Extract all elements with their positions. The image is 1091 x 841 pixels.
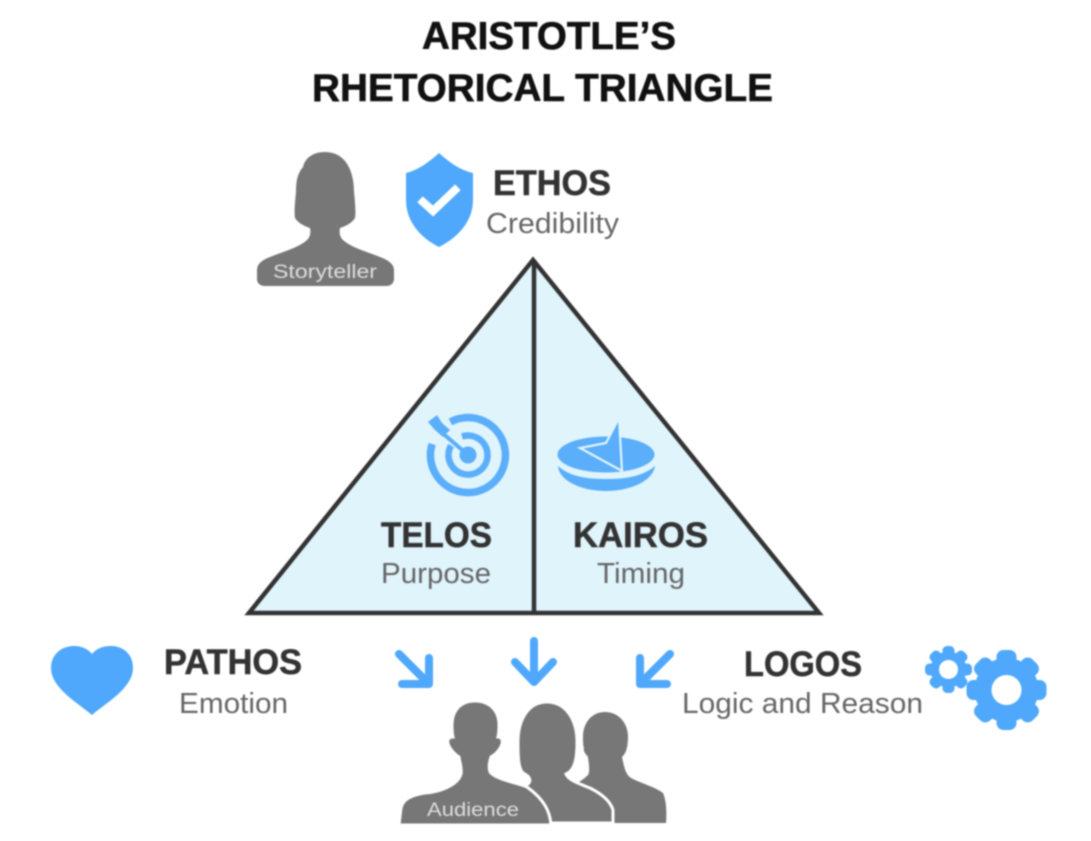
- logos label: [682, 645, 923, 720]
- pathos label: PATHOS: [164, 643, 302, 682]
- icon: storyteller silhouette: Storyteller: [273, 262, 378, 283]
- icon: pathos heart: [51, 646, 133, 715]
- icon: audience silhouettes: Audience: [427, 800, 519, 821]
- telos label: Purpose: [381, 558, 491, 590]
- icon: logos gears: [925, 646, 1046, 730]
- rhetorical triangle: [249, 260, 819, 613]
- telos label: TELOS: [381, 516, 492, 555]
- arrow: ethos to audience: [515, 641, 553, 682]
- title: [312, 15, 773, 110]
- ethos label: ETHOS: [493, 164, 611, 203]
- telos label: [381, 516, 492, 590]
- icon: ethos shield: [406, 153, 473, 247]
- icon: kairos sundial: [558, 418, 655, 491]
- icon: telos target: [428, 415, 505, 493]
- pathos label: Emotion: [179, 688, 288, 720]
- icon: audience silhouettes: [390, 701, 680, 830]
- logos label: LOGOS: [744, 645, 862, 684]
- logos label: Logic and Reason: [682, 688, 923, 720]
- title: ARISTOTLE’S: [422, 15, 676, 58]
- kairos label: [573, 516, 708, 590]
- arrow: logos to audience: [640, 654, 670, 684]
- ethos label: [486, 164, 620, 240]
- pathos label: [164, 643, 302, 720]
- arrow: pathos to audience: [399, 654, 429, 684]
- title: RHETORICAL TRIANGLE: [312, 67, 773, 110]
- kairos label: Timing: [597, 558, 685, 590]
- kairos label: KAIROS: [573, 516, 708, 555]
- icon: storyteller silhouette: [257, 152, 394, 286]
- ethos label: Credibility: [486, 208, 620, 240]
